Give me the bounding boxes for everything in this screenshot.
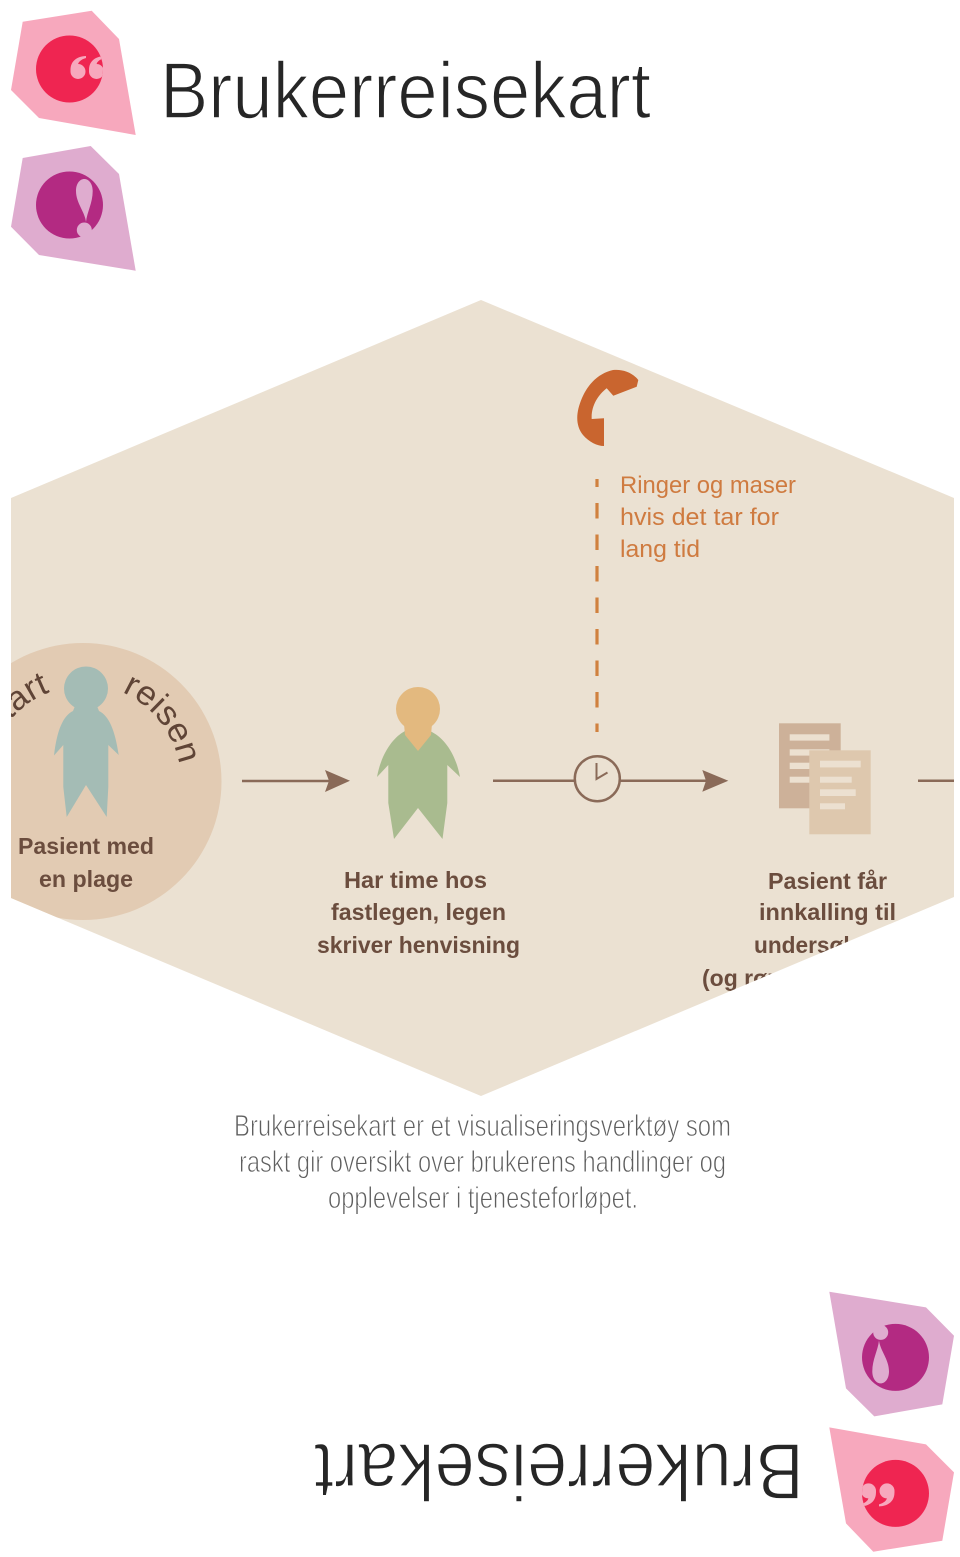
text: description: raskt gir oversikt over brukerens handlinger og: [239, 1144, 726, 1179]
dashed connector: [595, 479, 599, 732]
text: patient gets summons: innkalling til: [759, 899, 896, 925]
text: GP appointment: [317, 867, 520, 958]
text: calls and nags: [620, 472, 796, 563]
title: Brukerreisekart: [160, 46, 651, 135]
text: patient with a complaint: Pasient med: [18, 833, 154, 859]
arrow: start to GP: [242, 770, 350, 792]
icon: phone: [577, 370, 638, 446]
text: patient gets summons: Pasient får: [768, 868, 887, 894]
text: GP appointment: Har time hos: [344, 867, 487, 893]
text: calls and nags: hvis det tar for: [620, 504, 779, 531]
text: GP appointment: skriver henvisning: [317, 932, 520, 958]
text: description: Brukerreisekart er et visualiseringsverktøy som: [234, 1108, 731, 1143]
icon: pink quote badge: [11, 11, 136, 135]
curved label: reisen: reisen: [124, 677, 196, 762]
text: patient gets summons: (og røntgen): [702, 965, 837, 991]
panel: hexagon journey map: [11, 300, 954, 1096]
icon: pink quote badge rotated: [829, 1427, 954, 1552]
start circle: [0, 643, 222, 920]
text: GP appointment: fastlegen, legen: [331, 899, 506, 925]
text: description: [234, 1108, 731, 1215]
arrow: onward: [918, 780, 954, 782]
text: description: opplevelser i tjenesteforløpet.: [328, 1180, 638, 1215]
text: calls and nags: lang tid: [620, 536, 700, 563]
text: patient with a complaint: en plage: [39, 866, 133, 892]
icon: documents: [779, 723, 871, 834]
arrow: GP to referral with clock: [493, 756, 728, 801]
text: patient gets summons: undersøkelse: [754, 932, 900, 958]
title rotated: Brukerreisekart: [314, 1427, 804, 1516]
icon: purple exclamation badge: [11, 146, 136, 271]
icon: green person: [377, 687, 460, 839]
text: calls and nags: Ringer og maser: [620, 472, 796, 499]
icon: purple exclamation badge rotated: [829, 1292, 954, 1416]
icon: blue person: [54, 666, 119, 817]
text: patient gets summons: [702, 868, 900, 991]
text: patient with a complaint: [18, 833, 154, 892]
